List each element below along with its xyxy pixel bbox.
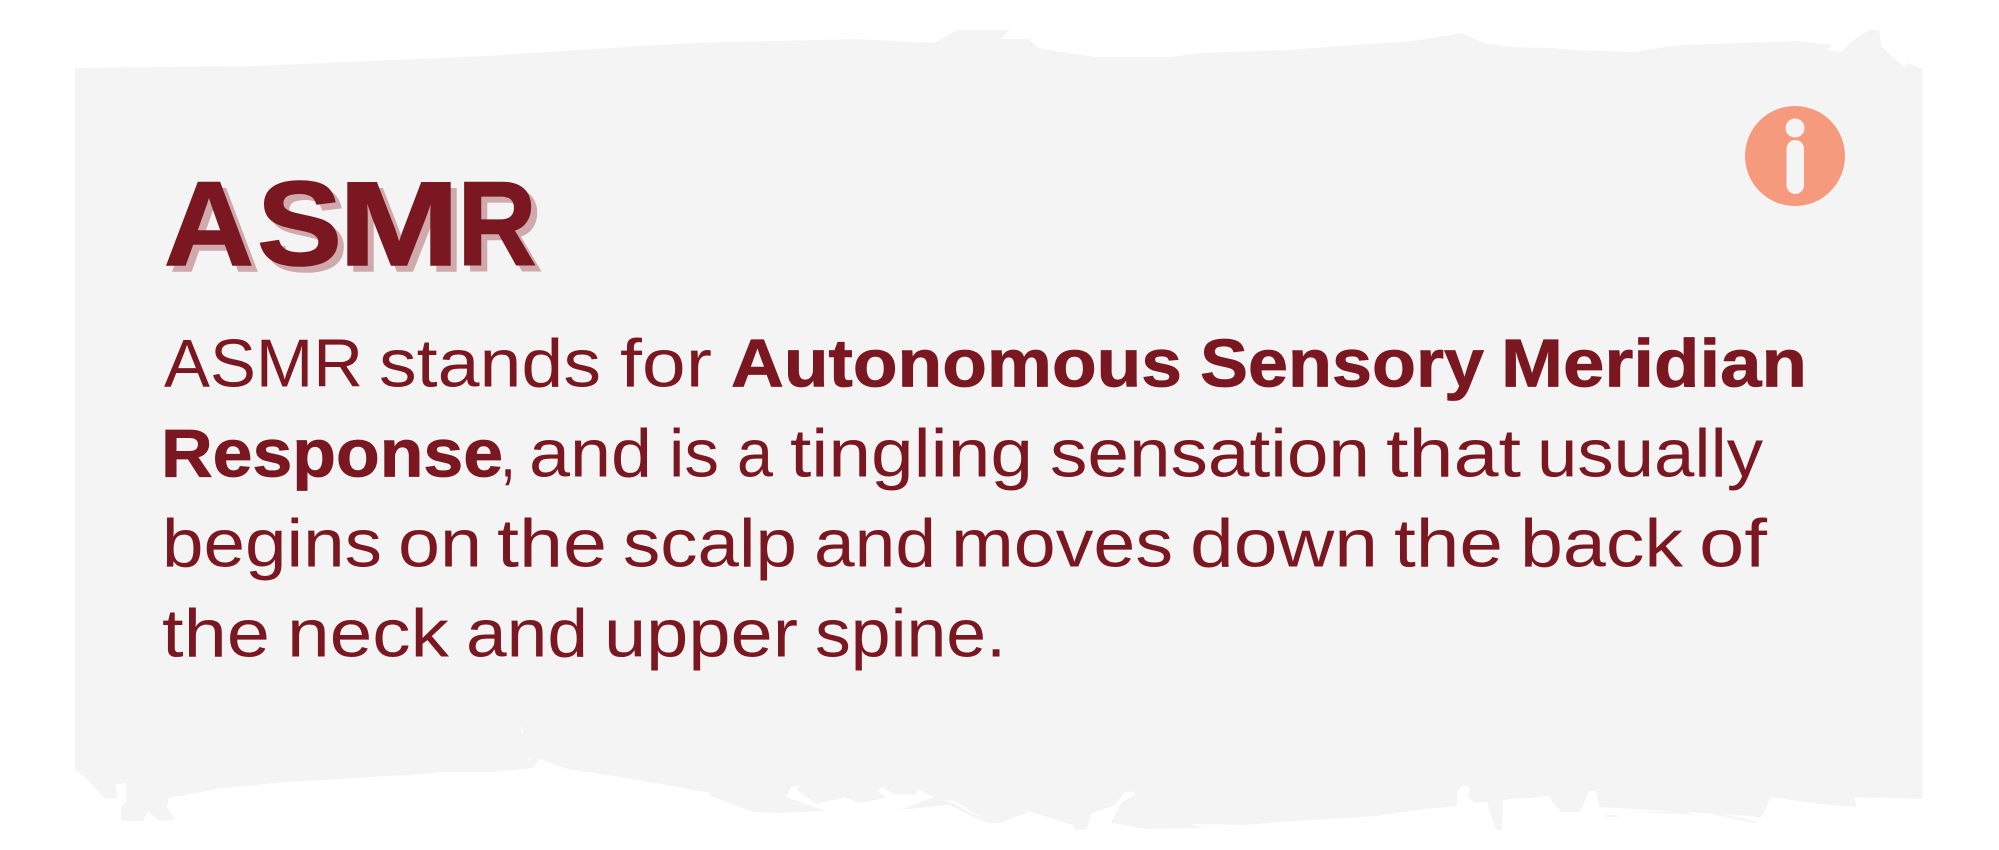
text block: definition: ASMR bbox=[164, 326, 363, 402]
text block: definition: spine. bbox=[815, 596, 1006, 672]
icon: information bbox=[1745, 106, 1845, 206]
title: R bbox=[464, 164, 542, 297]
text block: definition: stands bbox=[379, 326, 601, 402]
text block: definition: moves bbox=[951, 506, 1173, 582]
text block: definition: Autonomous bbox=[731, 326, 1182, 402]
text block: definition: Response bbox=[161, 416, 503, 492]
title: S bbox=[263, 164, 348, 297]
text block: definition: that bbox=[1386, 416, 1521, 492]
text block: definition: usually bbox=[1537, 416, 1763, 492]
text block: definition: tingling bbox=[790, 416, 1033, 492]
text block: definition: the bbox=[1394, 506, 1503, 582]
text block: definition: Sensory bbox=[1200, 326, 1484, 402]
text block: definition: neck bbox=[287, 596, 450, 672]
title: M bbox=[344, 164, 466, 297]
title: M bbox=[338, 158, 460, 291]
title: A bbox=[170, 164, 260, 297]
text block: definition: the bbox=[497, 506, 607, 582]
text block: definition: begins bbox=[162, 506, 382, 582]
text block: definition: , bbox=[500, 416, 516, 492]
text block: definition: and bbox=[466, 596, 588, 672]
text block: definition: upper bbox=[604, 596, 798, 672]
text block: definition: Meridian bbox=[1501, 326, 1807, 402]
title: S bbox=[257, 158, 342, 291]
title: A bbox=[164, 158, 254, 291]
text block: definition: scalp bbox=[623, 506, 797, 582]
text block: definition: the bbox=[162, 596, 270, 672]
text block: definition bbox=[161, 326, 1807, 672]
text block: definition: for bbox=[620, 326, 712, 402]
text block: definition: down bbox=[1190, 506, 1378, 582]
title: R bbox=[458, 158, 536, 291]
text block: definition: and bbox=[814, 506, 936, 582]
text block: definition: of bbox=[1699, 506, 1767, 582]
text block: definition: is bbox=[669, 416, 719, 492]
text block: definition: back bbox=[1520, 506, 1684, 582]
text block: definition: a bbox=[737, 416, 773, 492]
text block: definition: sensation bbox=[1050, 416, 1370, 492]
text block: definition: and bbox=[529, 416, 652, 492]
title bbox=[164, 158, 542, 297]
text block: definition: on bbox=[398, 506, 482, 582]
